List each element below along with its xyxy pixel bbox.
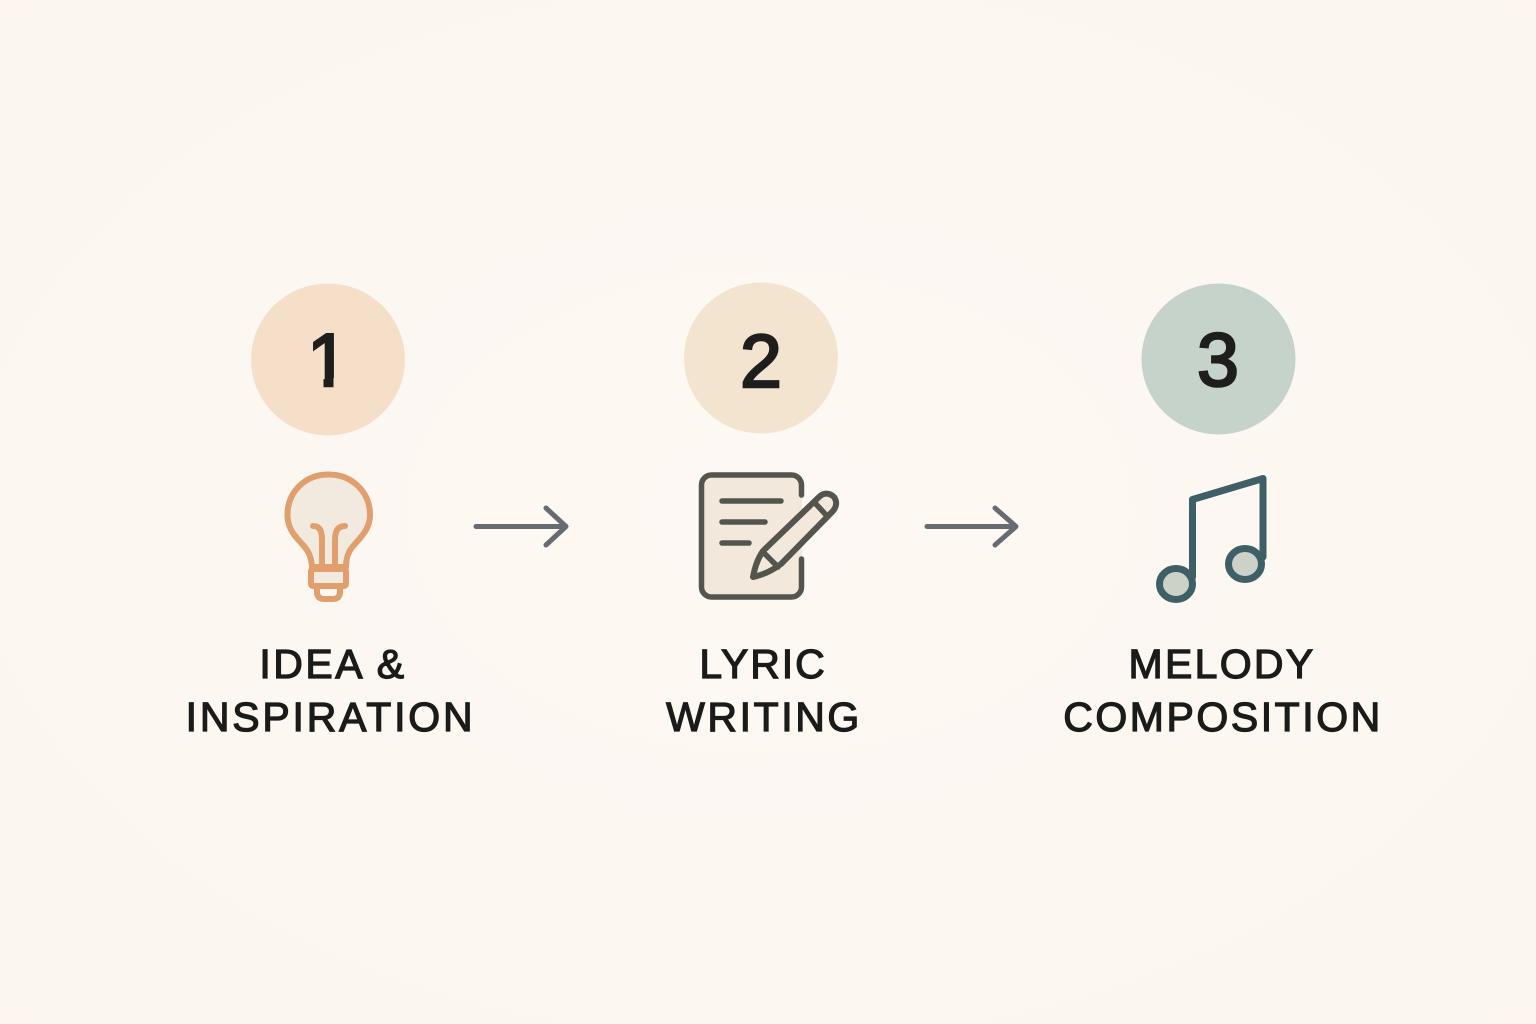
number badge 3 xyxy=(1142,284,1296,434)
icon: music note xyxy=(1160,478,1263,600)
label: idea and inspiration: INSPIRATION xyxy=(186,694,475,740)
number badge 1: 1 xyxy=(307,318,349,402)
arrow: step 1 to step 2 xyxy=(476,508,566,545)
icon: paper and pencil xyxy=(701,475,836,597)
step 2: lyric writing xyxy=(666,282,862,740)
label: lyric writing: WRITING xyxy=(666,694,862,740)
icon: light bulb xyxy=(288,474,370,599)
number badge 2 xyxy=(684,282,838,434)
label: melody composition: MELODY xyxy=(1129,641,1315,687)
label: melody composition: COMPOSITION xyxy=(1063,694,1383,740)
step 1: idea and inspiration xyxy=(186,284,475,740)
step 3: melody composition xyxy=(1063,284,1383,740)
label: lyric writing: LYRIC xyxy=(699,641,827,687)
number badge 2: 2 xyxy=(740,319,782,403)
number badge 3: 3 xyxy=(1197,318,1239,402)
arrow: step 2 to step 3 xyxy=(927,508,1016,545)
label: idea and inspiration: IDEA & xyxy=(259,641,407,687)
number badge 1 xyxy=(251,284,405,436)
